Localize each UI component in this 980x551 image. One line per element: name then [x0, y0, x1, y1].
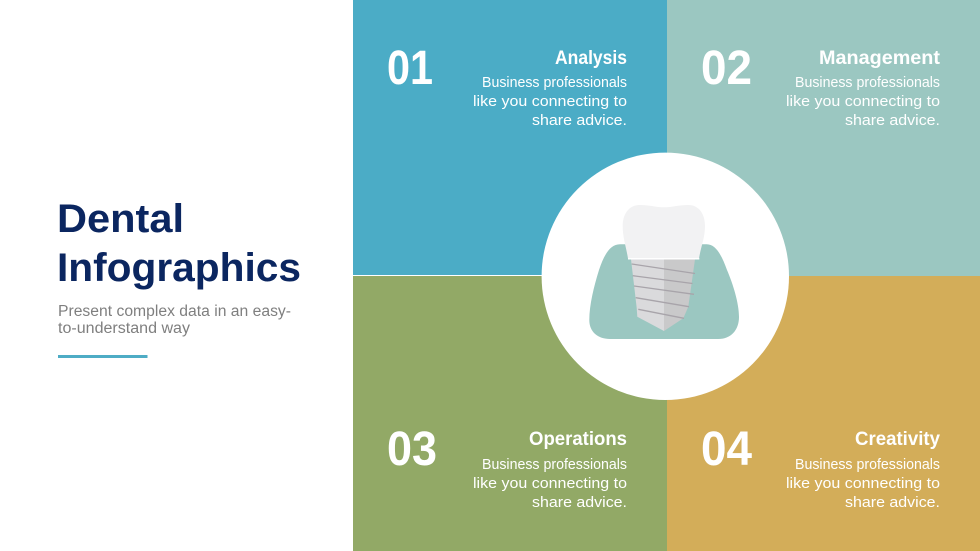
icon: dental implant	[589, 205, 739, 339]
body text: operations: share advice.	[532, 494, 627, 511]
subtitle: Present complex data in an easy-	[58, 303, 291, 320]
gum	[589, 244, 739, 339]
body text: operations	[473, 456, 627, 511]
implant screw right half	[664, 259, 695, 331]
panel: management	[667, 0, 980, 276]
body text: operations: Business professionals	[482, 456, 627, 473]
title: Infographics	[57, 246, 301, 290]
number 03: 03	[387, 423, 437, 476]
number 02: 02	[701, 42, 752, 95]
subtitle	[58, 303, 291, 337]
heading: operations: Operations	[529, 429, 627, 450]
screw threads	[632, 264, 695, 318]
number 04: 04	[701, 423, 752, 476]
number 01: 01	[387, 42, 433, 95]
body text: creativity: like you connecting to	[786, 475, 940, 492]
panel: operations	[353, 276, 667, 551]
crown	[623, 205, 705, 258]
accent rule	[58, 355, 148, 358]
body text: analysis	[473, 74, 627, 129]
body text: management: Business professionals	[795, 74, 940, 91]
subtitle: to-understand way	[58, 320, 190, 337]
center circle	[542, 153, 789, 400]
body text: creativity: share advice.	[845, 494, 940, 511]
title	[57, 197, 301, 290]
title: Dental	[57, 197, 184, 241]
panel: title area	[0, 0, 353, 551]
body text: analysis: like you connecting to	[473, 93, 627, 110]
panel: creativity	[667, 276, 980, 551]
body text: creativity	[786, 456, 940, 511]
heading: analysis: Analysis	[555, 48, 627, 69]
body text: operations: like you connecting to	[473, 475, 627, 492]
collar	[628, 258, 699, 260]
body text: creativity: Business professionals	[795, 456, 940, 473]
panel: analysis	[353, 0, 667, 275]
body text: management: like you connecting to	[786, 93, 940, 110]
heading: creativity: Creativity	[855, 429, 940, 450]
body text: management	[786, 74, 940, 129]
body text: analysis: share advice.	[532, 112, 627, 129]
heading: management: Management	[819, 48, 941, 69]
body text: analysis: Business professionals	[482, 74, 627, 91]
implant screw left half	[631, 259, 664, 331]
body text: management: share advice.	[845, 112, 940, 129]
